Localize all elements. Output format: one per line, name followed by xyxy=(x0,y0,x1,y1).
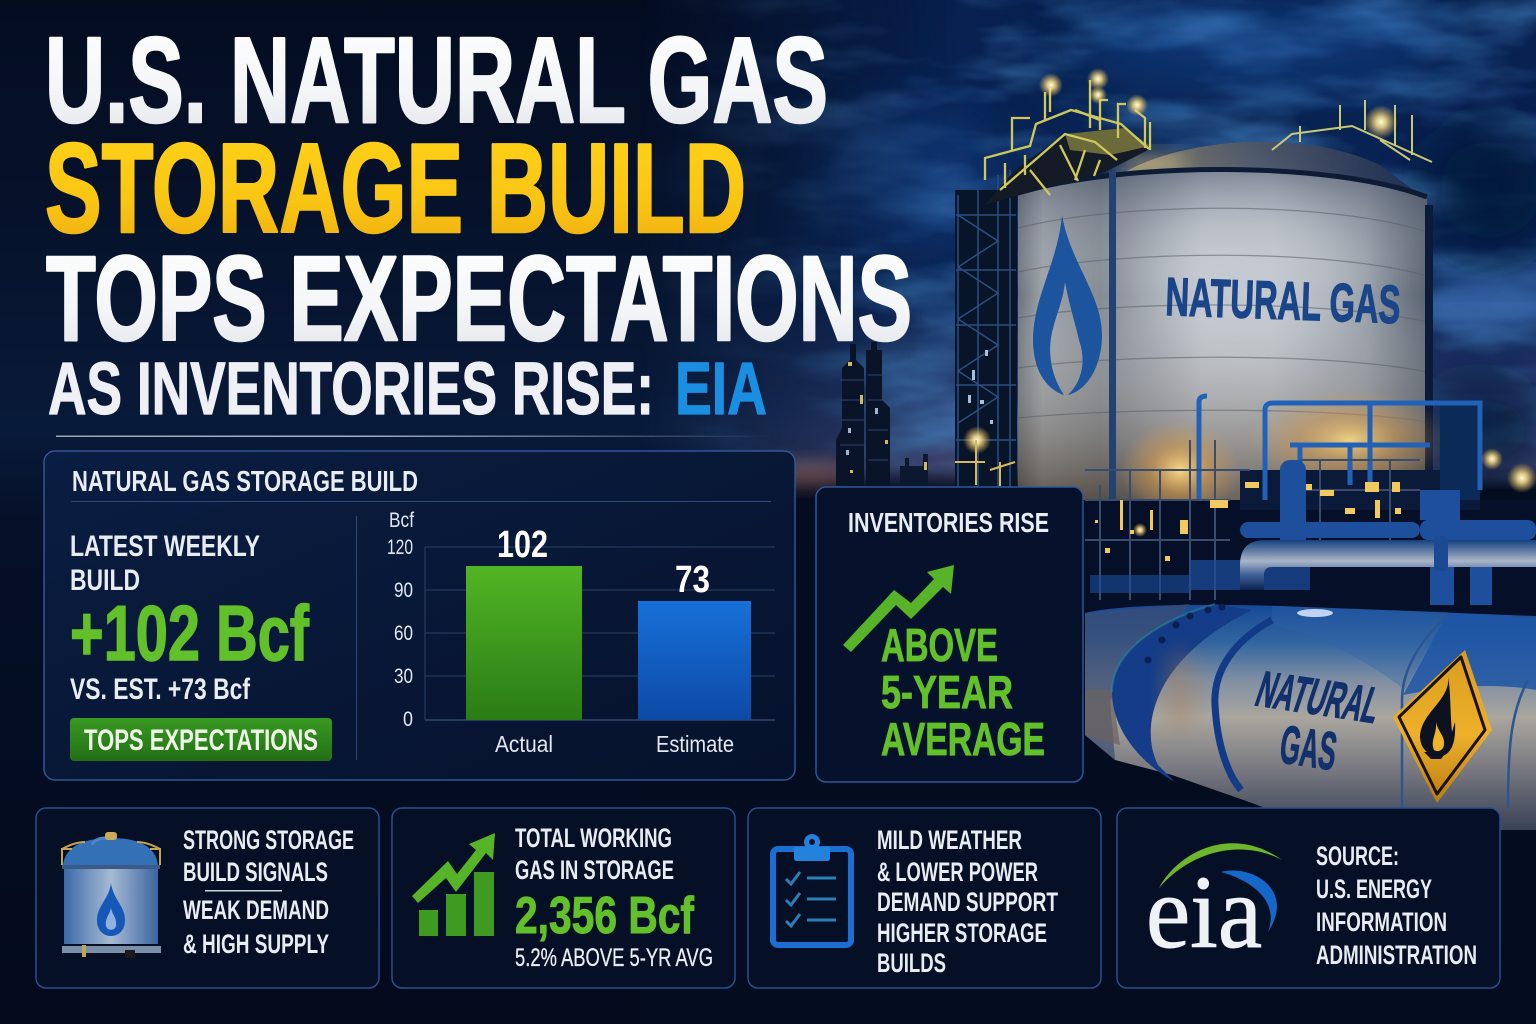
bar chart: actual vs estimate: Actual xyxy=(495,731,553,757)
background: night sky and dark ground xyxy=(0,0,1536,532)
panel: total working gas xyxy=(392,808,735,988)
tank-top platforms and lights xyxy=(985,68,1432,205)
latest weekly build stat: +102 Bcf xyxy=(70,589,310,677)
icon: flammable warning sign xyxy=(1393,650,1492,803)
badge: tops expectations xyxy=(70,718,332,761)
bar chart: actual vs estimate: 0 xyxy=(403,708,413,731)
bar chart: actual vs estimate: 102 xyxy=(497,524,548,566)
text: storage signals xyxy=(183,825,354,959)
text: weather drivers: HIGHER STORAGE xyxy=(877,918,1047,948)
panel: source xyxy=(1117,808,1500,988)
icon: flame on tank xyxy=(1033,215,1102,395)
text: working gas stat: TOTAL WORKING xyxy=(515,823,672,853)
large foreground pipeline xyxy=(1085,604,1536,830)
icon: rising bars with arrow xyxy=(412,833,495,936)
pipeline label: GAS xyxy=(1276,715,1340,782)
title: STORAGE BUILD xyxy=(45,117,746,259)
text: storage signals: & HIGH SUPPLY xyxy=(183,929,329,959)
text: working gas stat: GAS IN STORAGE xyxy=(515,855,674,885)
pipeline label xyxy=(1249,660,1389,782)
panel: mild weather xyxy=(748,808,1101,988)
storage tank scaffold stair tower xyxy=(955,170,1017,490)
panel heading: INVENTORIES RISE xyxy=(848,507,1049,538)
left refinery towers xyxy=(836,342,928,486)
bar chart: actual vs estimate: 120 xyxy=(387,536,413,559)
text: working gas stat xyxy=(515,823,713,972)
above 5-year average: AVERAGE xyxy=(881,713,1045,765)
icon: storage tank xyxy=(62,832,161,958)
title xyxy=(45,12,912,430)
text: weather drivers: MILD WEATHER xyxy=(877,825,1022,855)
panel: inventories rise xyxy=(816,487,1083,782)
title: TOPS EXPECTATIONS xyxy=(46,230,912,366)
above 5-year average: 5-YEAR xyxy=(881,666,1013,718)
text: source attribution: INFORMATION xyxy=(1316,907,1447,937)
bar chart: actual vs estimate xyxy=(387,509,775,757)
icon: clipboard checklist xyxy=(773,834,851,945)
storage tank body xyxy=(1018,169,1433,512)
title: AS INVENTORIES RISE: xyxy=(48,347,654,430)
title: EIA xyxy=(675,347,767,430)
process plant with pipes xyxy=(1085,390,1536,615)
text: working gas stat: 5.2% ABOVE 5-YR AVG xyxy=(515,944,713,972)
latest weekly build stat: LATEST WEEKLY xyxy=(70,530,260,563)
text: source attribution xyxy=(1316,841,1477,970)
bar chart: actual vs estimate: 90 xyxy=(394,579,413,602)
storage tank dome xyxy=(1105,142,1420,195)
pipeline label: NATURAL xyxy=(1249,660,1389,734)
latest weekly build stat: BUILD xyxy=(70,564,140,597)
text: weather drivers: BUILDS xyxy=(877,948,946,978)
latest weekly build stat: VS. EST. +73 Bcf xyxy=(70,673,251,706)
text: weather drivers: DEMAND SUPPORT xyxy=(877,887,1058,917)
text: source attribution: U.S. ENERGY xyxy=(1316,874,1432,904)
badge: tops expectations: TOPS EXPECTATIONS xyxy=(84,724,318,757)
above 5-year average xyxy=(881,619,1045,765)
icon: EIA logo: eia xyxy=(1146,855,1262,970)
panel heading: NATURAL GAS STORAGE BUILD xyxy=(72,466,418,498)
bar chart: actual vs estimate: Estimate xyxy=(656,731,734,757)
bar chart: actual vs estimate: 73 xyxy=(675,559,710,601)
bar chart: actual vs estimate: Bcf xyxy=(389,509,414,532)
text: storage signals: WEAK DEMAND xyxy=(183,895,329,925)
text: storage signals: BUILD SIGNALS xyxy=(183,857,328,887)
panel: natural gas storage build xyxy=(44,451,795,780)
icon: rising arrow xyxy=(843,565,954,652)
horizontal elbow pipe xyxy=(1240,536,1536,590)
text: source attribution: SOURCE: xyxy=(1316,841,1399,871)
bar chart: actual vs estimate: 30 xyxy=(394,665,413,688)
bar chart: actual vs estimate: 60 xyxy=(394,622,413,645)
text: weather drivers xyxy=(877,825,1058,978)
above 5-year average: ABOVE xyxy=(881,619,998,671)
latest weekly build stat xyxy=(70,530,310,706)
title: U.S. NATURAL GAS xyxy=(45,12,828,148)
panel: strong storage build signals xyxy=(36,808,379,988)
text: working gas stat: 2,356 Bcf xyxy=(515,887,695,945)
text: weather drivers: & LOWER POWER xyxy=(877,857,1038,887)
text: storage signals: STRONG STORAGE xyxy=(183,825,354,855)
